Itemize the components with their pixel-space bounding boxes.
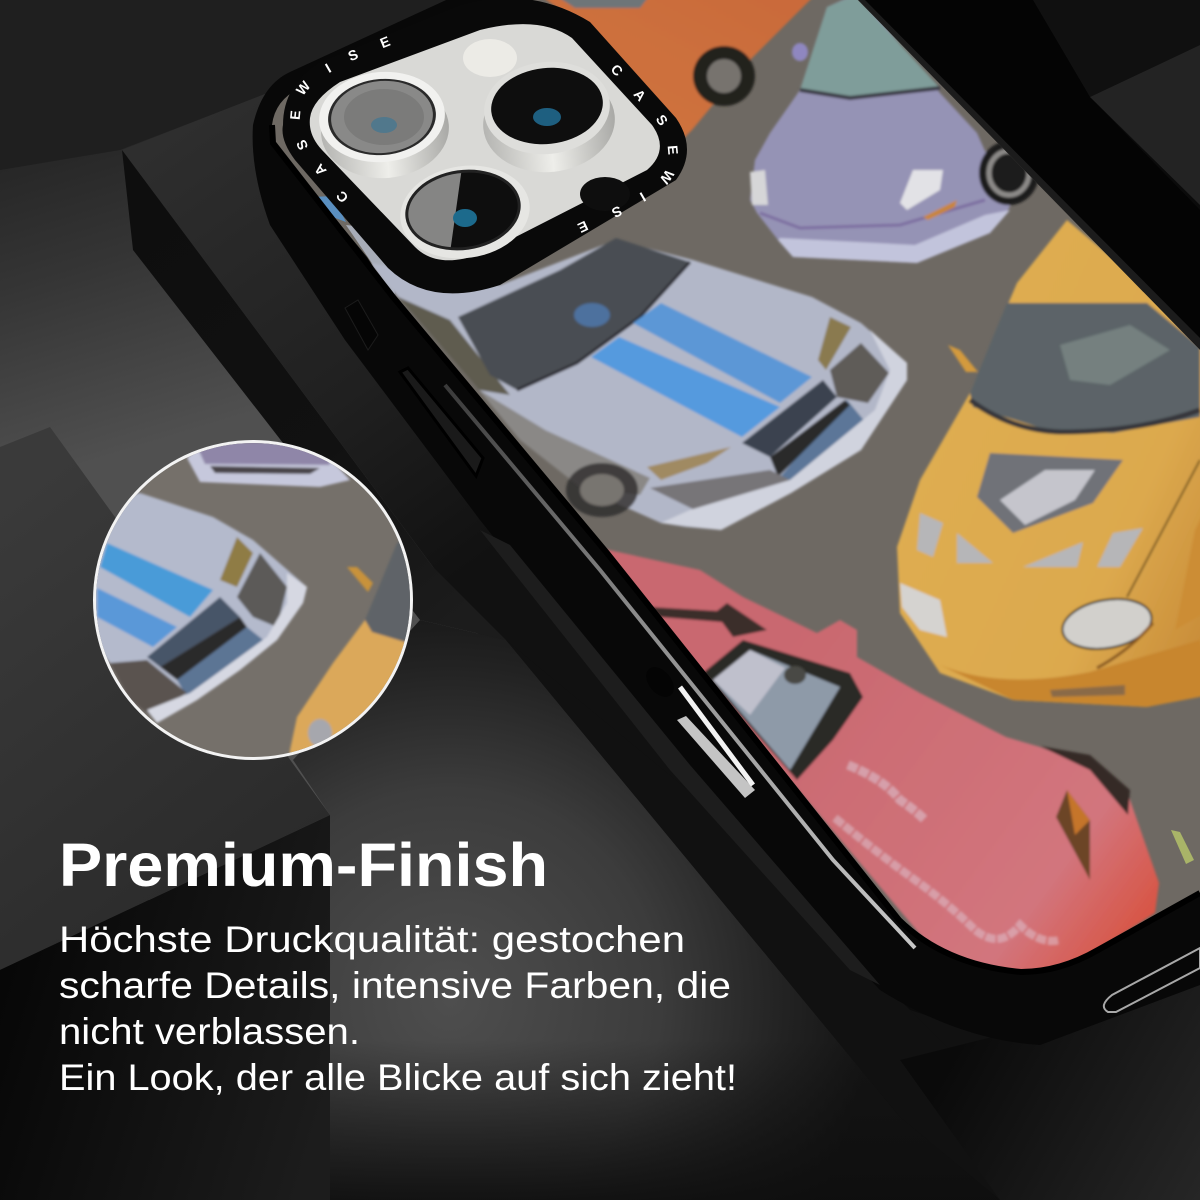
body text: Ein Look, der alle Blicke auf sich zieht! (59, 1057, 737, 1098)
green marker (1171, 830, 1194, 864)
ring lettering: CASEWISE: I (637, 189, 649, 205)
side button: volume slot (400, 368, 483, 476)
ring lettering: CASEWISE: A (311, 161, 329, 179)
ring lettering: CASEWISE: S (293, 137, 311, 153)
phone case body (253, 0, 1200, 1045)
heading: Premium-Finish (59, 831, 548, 899)
body text (59, 919, 737, 1098)
microphone and lidar (580, 177, 630, 211)
charging port (1104, 948, 1200, 1012)
ring lettering: CASEWISE: E (665, 145, 681, 155)
print strip beside camera (318, 196, 346, 222)
ring lettering: CASEWISE: E (287, 110, 303, 120)
ring lettering: CASEWISE: E (378, 33, 392, 51)
camera island with CASEWISE ring (282, 0, 687, 293)
glossy rim highlights and side button (272, 125, 1200, 1012)
body text: nicht verblassen. (59, 1011, 360, 1052)
side button: mute switch (345, 300, 378, 350)
camera glass plate (310, 24, 660, 260)
ring lettering: CASEWISE: S (653, 112, 671, 128)
lens: top right (478, 56, 620, 179)
car: pink (600, 548, 1159, 985)
body text: Höchste Druckqualität: gestochen (59, 919, 685, 960)
car: purple (750, 0, 1039, 263)
detail: silver car (90, 493, 307, 723)
ring lettering: CASEWISE: W (656, 167, 677, 188)
ring lettering: CASEWISE: I (322, 60, 334, 76)
car: silver with blue stripes (370, 238, 907, 530)
ring lettering: CASEWISE: C (608, 61, 626, 79)
ring lettering: CASEWISE: W (293, 77, 314, 98)
flash (463, 39, 517, 77)
ring lettering: CASEWISE: E (575, 218, 591, 236)
ring lettering: CASEWISE: S (346, 46, 360, 64)
ring lettering: CASEWISE: S (609, 203, 625, 221)
car: yellow (897, 220, 1200, 707)
ring lettering: CASEWISE: C (333, 188, 351, 206)
detail: purple car bumper (187, 442, 350, 487)
circle: magnified print detail (90, 435, 420, 770)
car: orange (540, 0, 815, 138)
lens: top left (315, 67, 453, 183)
case print: street racing cars (260, 0, 1200, 995)
lens: bottom (400, 166, 530, 258)
detail: yellow car (288, 542, 410, 753)
body text: scharfe Details, intensive Farben, die (59, 965, 731, 1006)
ring lettering: CASEWISE (287, 33, 681, 236)
ring lettering: CASEWISE: A (631, 86, 649, 104)
